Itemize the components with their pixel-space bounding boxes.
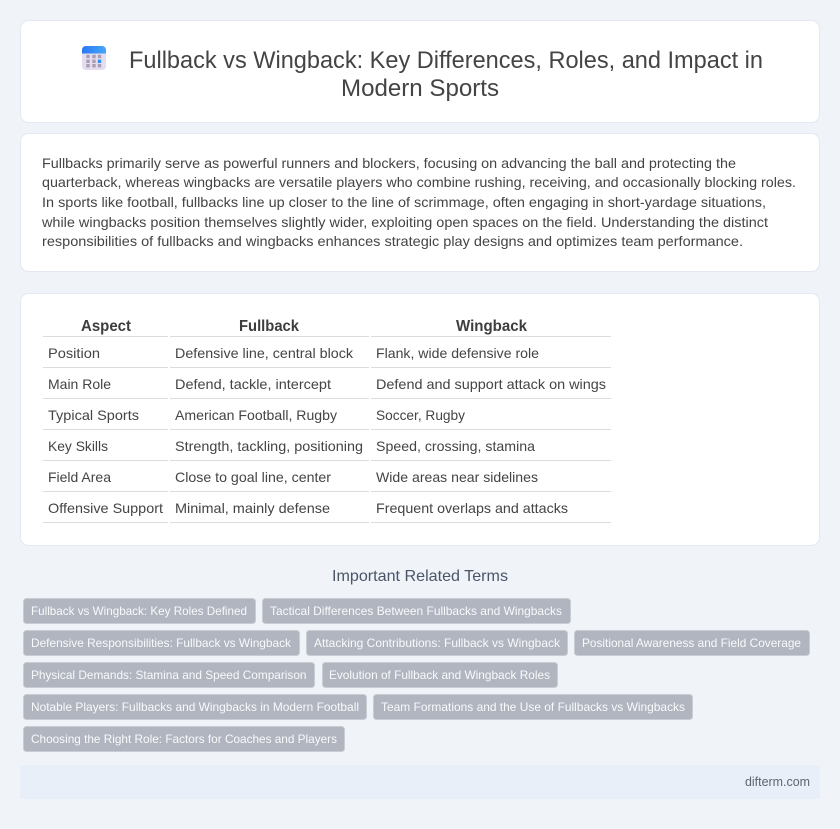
tag [24,598,256,624]
text block: summary: while wingbacks position themselves slightly wider, exploiting open spaces on the field. Understanding the distinct [41,214,768,230]
table row: field area: Wide areas near sidelines [376,469,538,485]
panel: summary paragraph [20,134,820,272]
text block: summary: quarterback, whereas wingbacks are versatile players who combine rushing, receiving, and occasionally blocking roles. [42,174,796,190]
tag [306,630,568,656]
table row: position: Defensive line, central block [175,345,354,361]
footer: difterm.com [745,774,810,789]
table row: typical sports: Soccer, Rugby [376,407,465,423]
text block: summary [41,155,796,249]
tag: Tactical Differences Between Fullbacks and Wingbacks [270,604,562,618]
table row: offensive support: Frequent overlaps and attacks [376,500,568,516]
table row: key skills: Speed, crossing, stamina [376,438,535,454]
table row: typical sports: American Football, Rugby [175,407,337,423]
table row: main role: Defend, tackle, intercept [175,376,331,392]
footer [20,765,820,799]
table row: offensive support: Offensive Support [48,500,163,516]
table row: field area [48,469,538,485]
table row: key skills [48,438,535,454]
table row: field area: Close to goal line, center [175,469,331,485]
tag: Positional Awareness and Field Coverage [582,636,801,650]
table row: main role: Main Role [48,376,111,392]
table header: Fullback [239,318,299,335]
text block: summary: Fullbacks primarily serve as powerful runners and blockers, focusing on advancing the ball and protecting the [42,155,736,171]
text block: summary: responsibilities of fullbacks and wingbacks enhances strategic play designs and optimizes team performance. [42,233,743,249]
tag: Notable Players: Fullbacks and Wingbacks in Modern Football [31,700,359,714]
table row: position: Position [48,345,100,361]
table header: Aspect [81,318,132,335]
title: Fullback vs Wingback: Key Differences, Roles, and Impact in [129,47,763,74]
text block: summary: In sports like football, fullbacks line up closer to the line of scrimmage, often engaging in short-yardage situations, [42,194,766,210]
table row: typical sports [48,407,465,423]
tag [24,630,300,656]
tag: Defensive Responsibilities: Fullback vs Wingback [31,636,292,650]
table row: main role [48,376,606,392]
heading: related terms: Important Related Terms [332,568,508,585]
tag: Fullback vs Wingback: Key Roles Defined [31,604,247,618]
table row: position: Flank, wide defensive role [376,345,539,361]
tag: Team Formations and the Use of Fullbacks vs Wingbacks [381,700,685,714]
tag: Physical Demands: Stamina and Speed Comparison [31,668,306,682]
tag [574,630,810,656]
table row: offensive support: Minimal, mainly defense [175,500,330,516]
tag [24,694,366,720]
tag [24,726,344,752]
tag [374,694,692,720]
tag [322,662,558,688]
tag: Choosing the Right Role: Factors for Coaches and Players [31,732,337,746]
tag list: related terms [24,598,810,752]
panel: header [20,20,820,122]
table row: field area: Field Area [48,469,111,485]
table row: offensive support [48,500,568,516]
tag [24,662,314,688]
panel: comparison table [20,294,820,546]
tag: Evolution of Fullback and Wingback Roles [329,668,550,682]
title: Modern Sports [341,75,499,102]
table row: key skills: Strength, tackling, positioning [175,438,363,454]
icon: calendar [82,46,106,70]
table row: typical sports: Typical Sports [48,407,139,423]
title [129,47,763,102]
table row: main role: Defend and support attack on wings [376,376,606,392]
tag [262,598,570,624]
table header [81,318,527,335]
tag: Attacking Contributions: Fullback vs Wingback [314,636,561,650]
table row: position [48,345,539,361]
table row: key skills: Key Skills [48,438,108,454]
table header: Wingback [456,318,527,335]
